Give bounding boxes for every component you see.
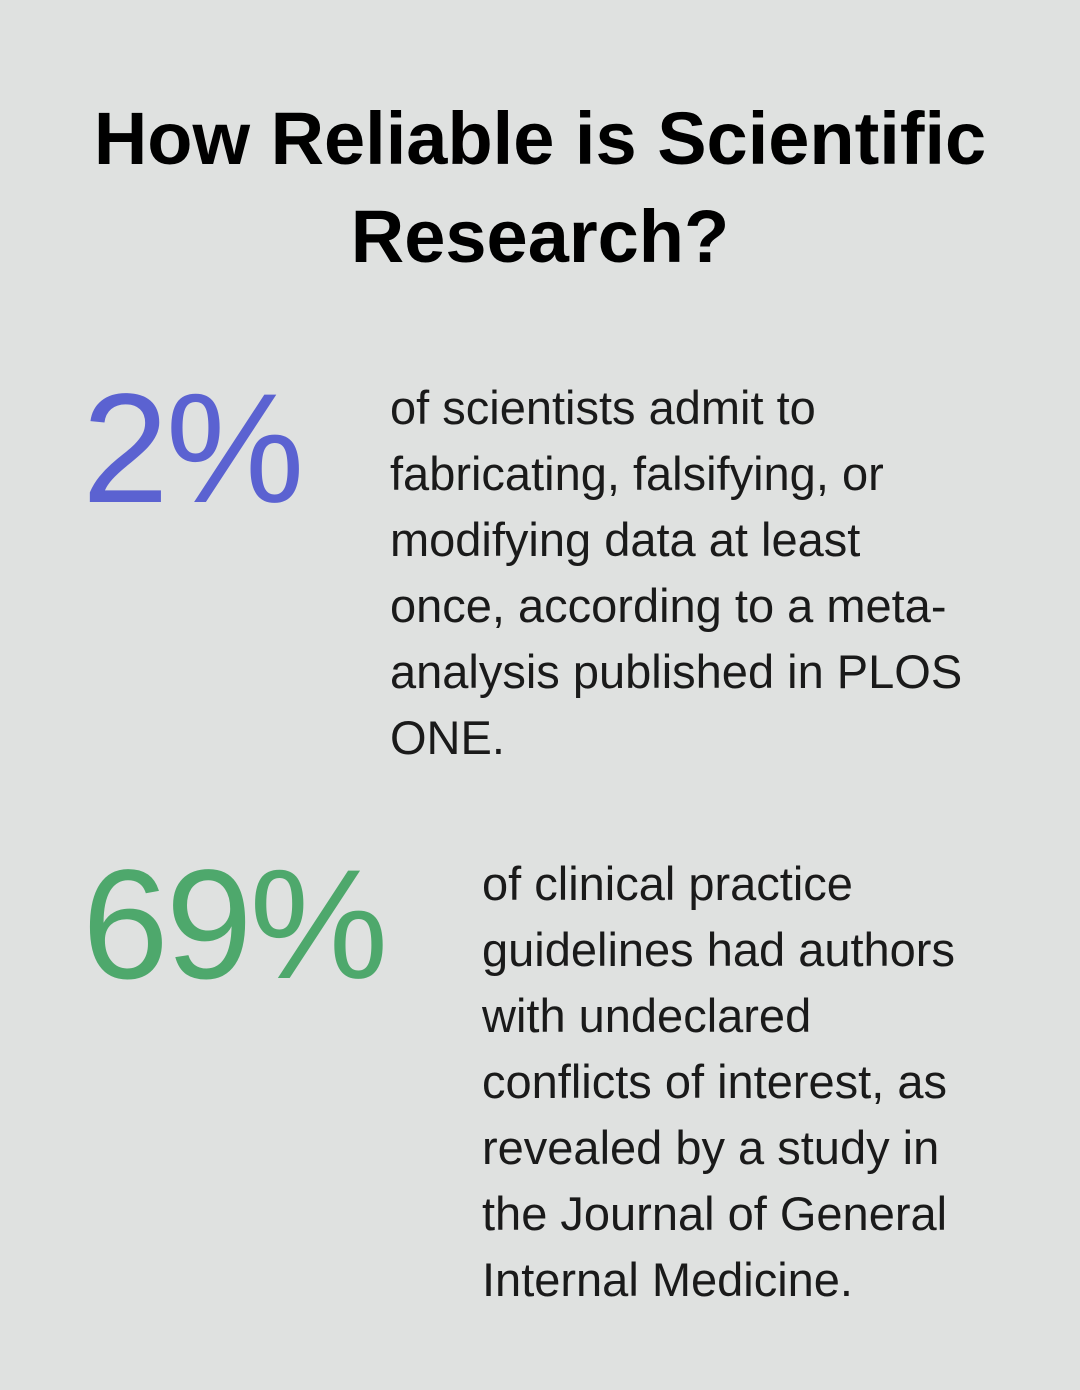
stat description 2: with undeclared <box>482 989 811 1042</box>
stat description 1: fabricating, falsifying, or <box>390 447 884 500</box>
stat description 2: guidelines had authors <box>482 923 955 976</box>
stat description 1: once, according to a meta- <box>390 579 946 632</box>
stat description 2: the Journal of General <box>482 1187 947 1240</box>
stat description 1: of scientists admit to <box>390 381 816 434</box>
stat description 1: modifying data at least <box>390 513 860 566</box>
stat description 1: analysis published in PLOS <box>390 645 962 698</box>
title: Research? <box>351 195 729 278</box>
stat description 2: revealed by a study in <box>482 1121 939 1174</box>
stat description 2: Internal Medicine. <box>482 1253 853 1306</box>
title <box>94 97 986 278</box>
stat description 2: conflicts of interest, as <box>482 1055 947 1108</box>
title: How Reliable is Scientific <box>94 97 986 180</box>
stat description 1 <box>390 381 962 764</box>
stat number: 69%: 69% <box>82 838 385 1012</box>
stat number: 2%: 2% <box>82 362 301 536</box>
stat description 2 <box>482 857 955 1306</box>
stat description 1: ONE. <box>390 711 505 764</box>
stat block: 69% <box>82 838 955 1306</box>
stat block: 2% <box>82 362 962 764</box>
stat description 2: of clinical practice <box>482 857 853 910</box>
